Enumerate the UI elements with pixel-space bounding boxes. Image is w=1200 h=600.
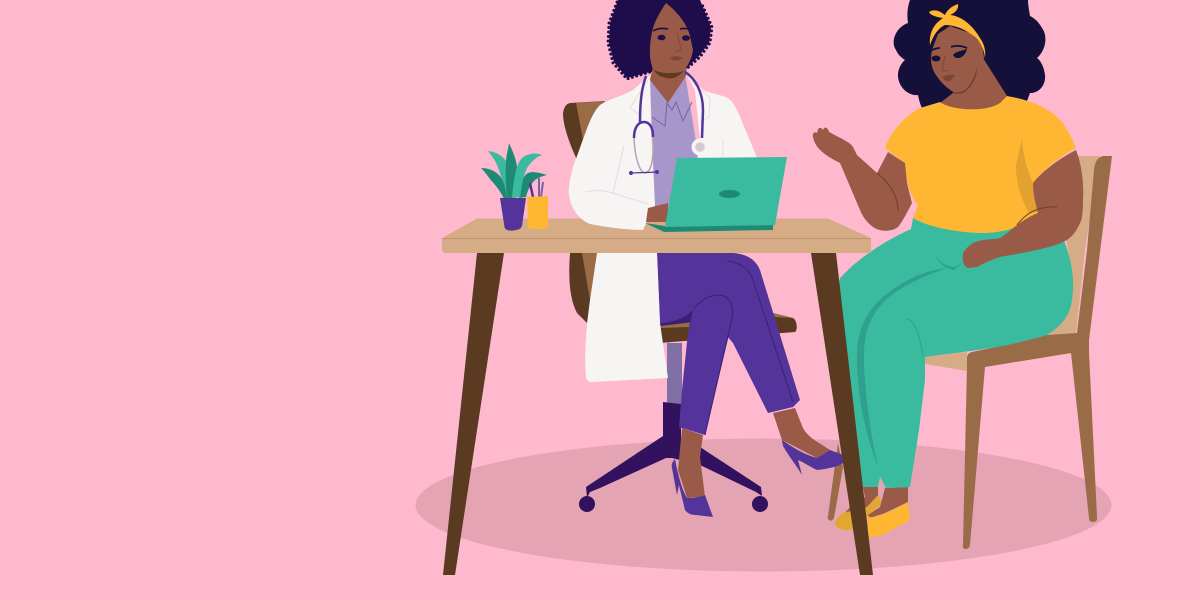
laptop <box>645 157 787 232</box>
lab coat lower panel <box>585 253 668 382</box>
table <box>442 218 873 575</box>
neck <box>940 58 1007 116</box>
doctor upper body <box>569 0 758 230</box>
table top <box>442 218 871 253</box>
left shin and heel <box>672 428 713 517</box>
face <box>929 26 984 94</box>
doctor lower body <box>585 253 843 517</box>
yellow headband <box>929 4 985 58</box>
hand on laptop <box>646 203 668 222</box>
doctor chair <box>563 101 797 512</box>
shirt collar <box>652 102 692 126</box>
green trousers <box>827 218 1073 488</box>
hair fill <box>609 0 711 78</box>
floor shadow <box>416 438 1112 572</box>
white lab coat <box>569 72 758 230</box>
left arm and raised hand <box>813 128 912 231</box>
face <box>650 3 693 78</box>
right arm and resting hand <box>963 150 1083 268</box>
neck <box>650 62 686 103</box>
table legs <box>443 253 504 575</box>
yellow shirt <box>885 96 1076 233</box>
lavender shirt <box>650 74 699 215</box>
potted plant <box>481 143 547 231</box>
hair outline bumps <box>608 2 712 79</box>
hair <box>894 0 1045 108</box>
stethoscope <box>629 72 708 175</box>
patient <box>813 0 1083 537</box>
feet and shoes <box>835 487 910 537</box>
purple trousers <box>657 253 800 435</box>
patient chair <box>828 156 1112 549</box>
right shin and heel <box>773 408 843 475</box>
pencil cup <box>527 178 548 229</box>
